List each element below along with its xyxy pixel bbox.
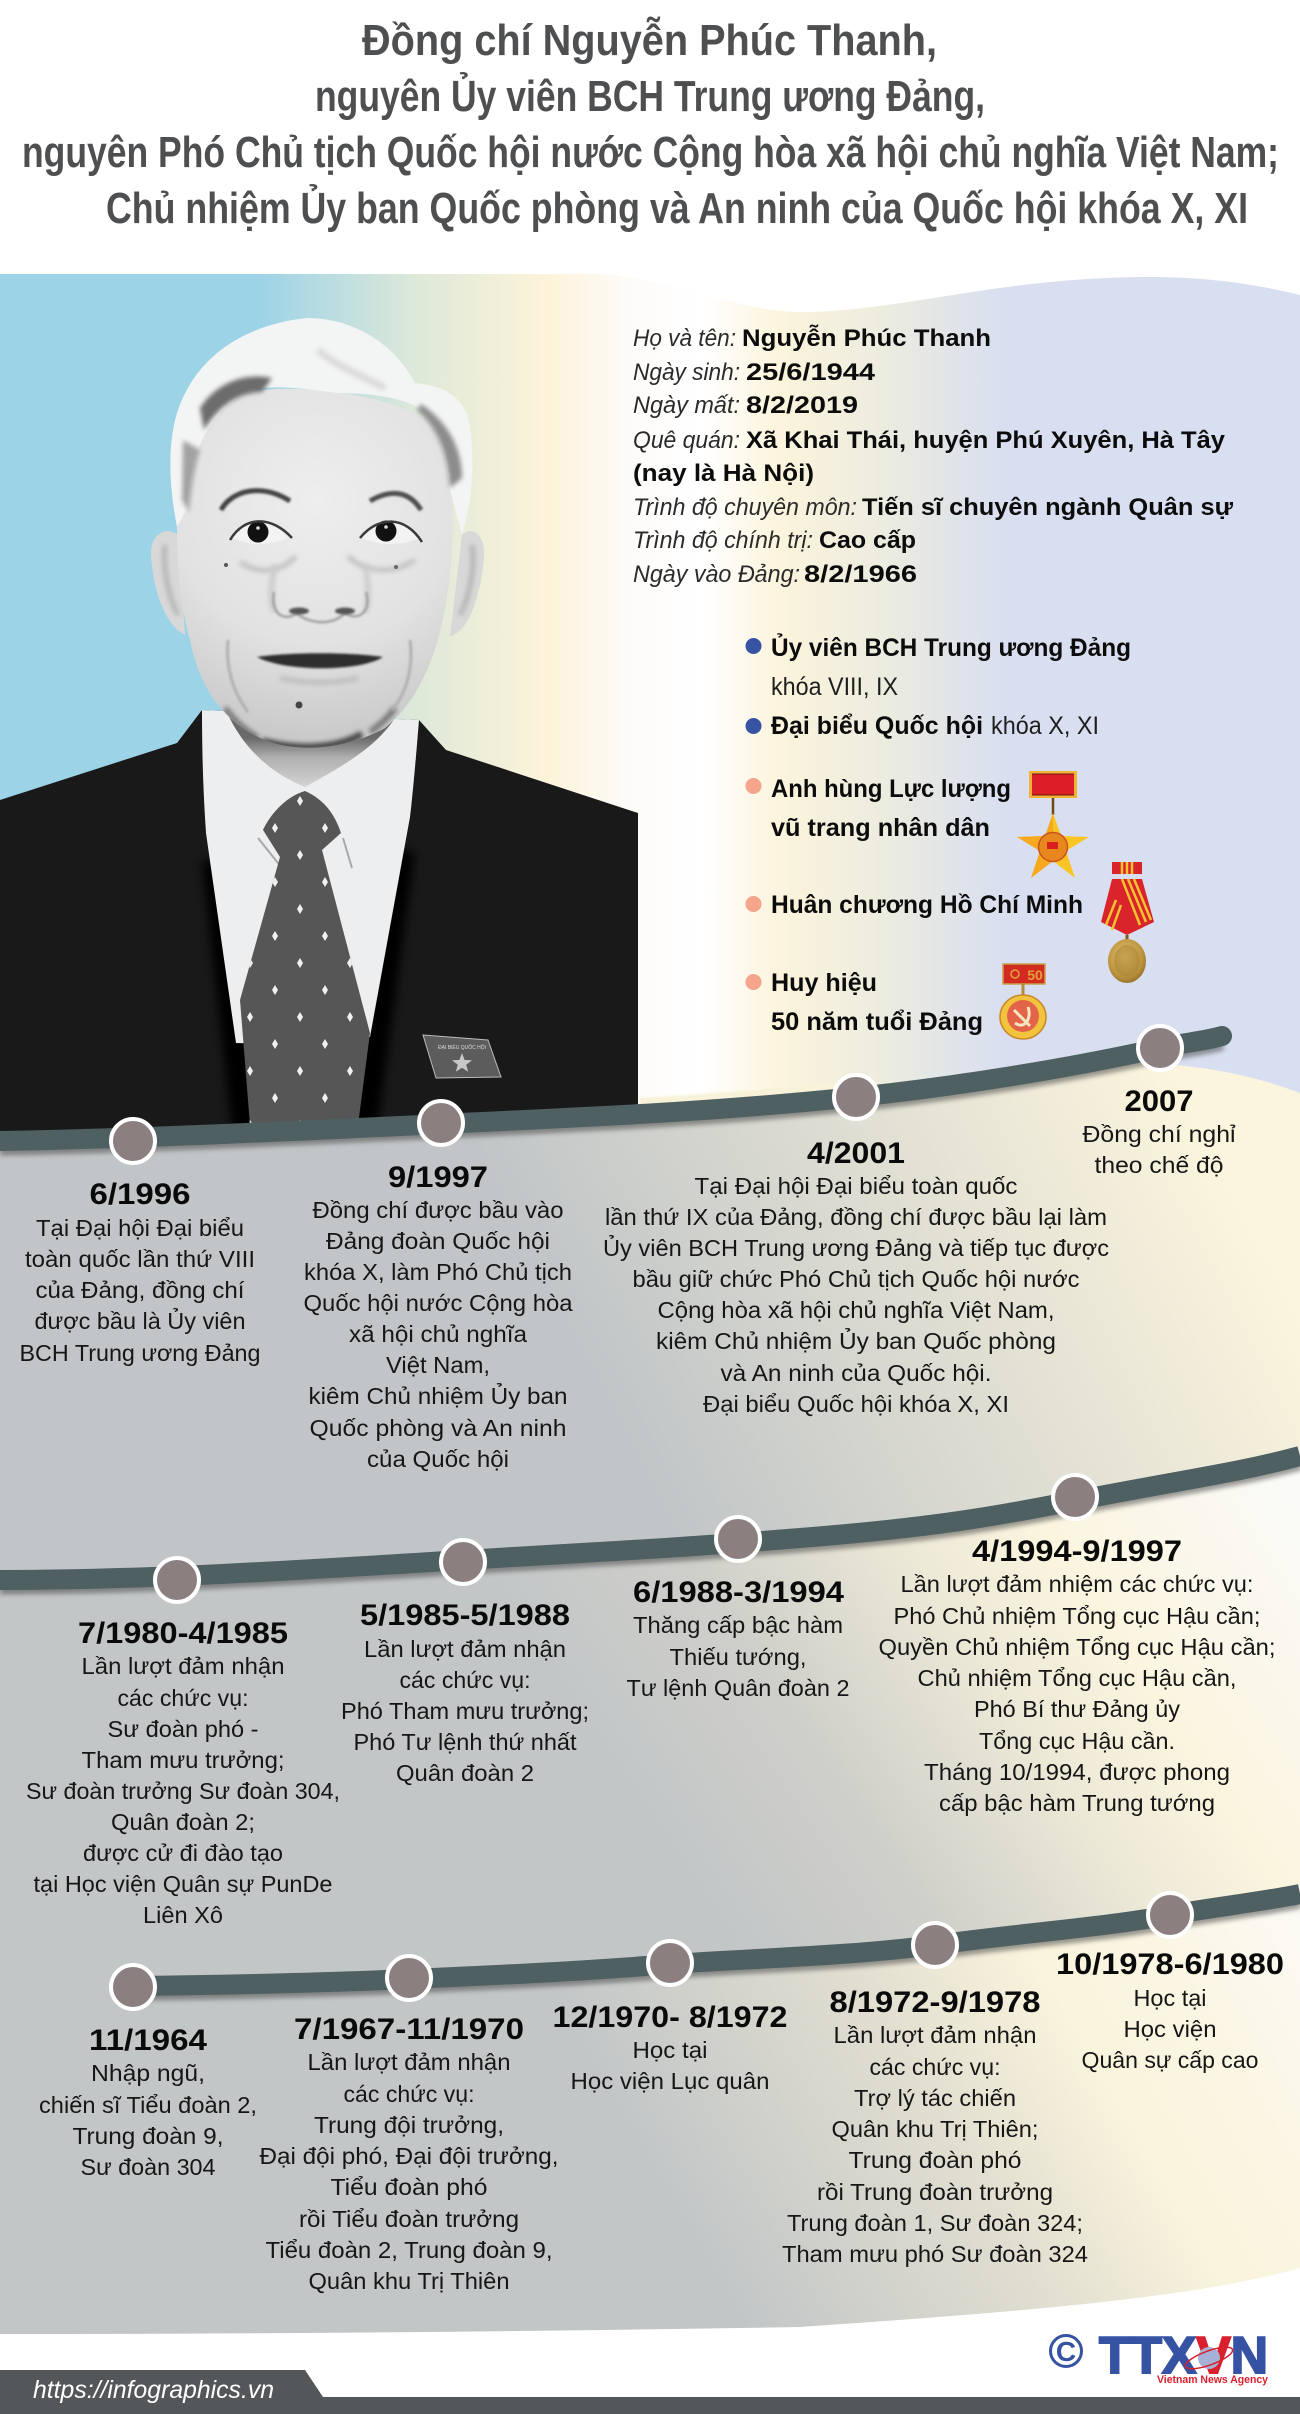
timeline entry: 11/1964: chiến sĩ Tiểu đoàn 2,	[39, 2092, 257, 2118]
timeline entry: 11/1964: Trung đoàn 9,	[72, 2123, 224, 2149]
biography details: Trình độ chính trị:	[633, 527, 813, 554]
portrait photo	[0, 318, 638, 1145]
biography details: Ngày vào Đảng:	[633, 561, 800, 588]
timeline entry: 7/1980-4/1985: Sư đoàn trưởng Sư đoàn 304,	[26, 1778, 340, 1804]
timeline entry: 4/1994-9/1997: cấp bậc hàm Trung tướng	[939, 1790, 1215, 1816]
timeline entry: 8/1972-9/1978: các chức vụ:	[870, 2054, 1000, 2080]
timeline entry: 7/1980-4/1985: Lần lượt đảm nhận	[82, 1653, 284, 1679]
biography details: Quê quán:	[633, 427, 740, 454]
lapel pin: ĐẠI BIỂU QUỐC HỘI	[438, 1044, 486, 1051]
timeline entry: 9/1997: của Quốc hội	[367, 1446, 509, 1472]
positions list: Đại biểu Quốc hội	[771, 712, 983, 740]
positions list: khóa X, XI	[991, 712, 1099, 740]
timeline entry: 7/1967-11/1970: các chức vụ:	[344, 2081, 474, 2107]
timeline entry: 7/1980-4/1985: Quân đoàn 2;	[111, 1809, 255, 1835]
timeline entry: 7/1967-11/1970: Trung đội trưởng,	[314, 2112, 504, 2138]
title: nguyên Ủy viên BCH Trung ương Đảng,	[315, 70, 985, 121]
timeline entry: 4/2001: Đại biểu Quốc hội khóa X, XI	[703, 1391, 1009, 1417]
timeline entry: 9/1997: Đảng đoàn Quốc hội	[326, 1228, 550, 1254]
timeline entry: 4/1994-9/1997: 4/1994-9/1997	[972, 1535, 1182, 1568]
biography details: Ngày mất:	[633, 392, 740, 419]
logo: TTXVN Vietnam News Agency: TTXVN	[1099, 2327, 1268, 2385]
timeline line 3	[111, 1893, 1300, 2009]
panel: timeline background below third line	[0, 1894, 1300, 2334]
timeline entry: 9/1997: xã hội chủ nghĩa	[349, 1321, 527, 1347]
timeline entry: 9/1997: Quốc phòng và An ninh	[310, 1415, 566, 1441]
panel: timeline background between second and third line	[0, 1456, 1300, 1986]
footer bar	[0, 2370, 1300, 2414]
timeline entry: 7/1980-4/1985: được cử đi đào tạo	[83, 1840, 283, 1866]
timeline entry: 7/1967-11/1970: 7/1967-11/1970	[294, 2013, 524, 2046]
timeline entry: 4/2001: Ủy viên BCH Trung ương Đảng và tiếp tục được	[603, 1233, 1109, 1261]
award: Anh hùng Lực lượng vũ trang nhân dân: Anh hùng Lực lượng	[771, 775, 1011, 803]
timeline entry: 6/1996	[20, 1178, 260, 1366]
timeline entry: 12/1970- 8/1972: 12/1970- 8/1972	[552, 2001, 788, 2034]
timeline shadows	[0, 1042, 1300, 1992]
timeline entry: 7/1980-4/1985: Tham mưu trưởng;	[82, 1747, 284, 1773]
timeline entry: 9/1997	[304, 1161, 573, 1472]
timeline entry: 9/1997: Quốc hội nước Cộng hòa	[304, 1290, 573, 1316]
timeline entry: 9/1997: kiêm Chủ nhiệm Ủy ban	[308, 1381, 568, 1409]
positions list: khóa VIII, IX	[771, 673, 898, 701]
panel: top gradient background	[0, 274, 1300, 1160]
timeline entry: 7/1967-11/1970: Lần lượt đảm nhận	[308, 2049, 510, 2075]
icon: party badge	[1000, 964, 1046, 1039]
timeline entry: 4/2001: Tại Đại hội Đại biểu toàn quốc	[694, 1173, 1018, 1199]
icon: hero medal	[1017, 771, 1089, 878]
timeline entry: 7/1967-11/1970: Quân khu Trị Thiên	[308, 2268, 510, 2294]
timeline entry: 5/1985-5/1988: các chức vụ:	[400, 1667, 530, 1693]
timeline entry: 4/1994-9/1997: Chủ nhiệm Tổng cục Hậu cần,	[918, 1665, 1236, 1691]
timeline entry: 6/1988-3/1994: Tư lệnh Quân đoàn 2	[626, 1675, 850, 1701]
timeline entry: 11/1964: 11/1964	[89, 2024, 207, 2057]
award: Anh hùng Lực lượng vũ trang nhân dân	[746, 771, 1089, 878]
biography details: Ngày sinh:	[633, 359, 740, 386]
timeline entry: 4/1994-9/1997: Lần lượt đảm nhiệm các chức vụ:	[900, 1571, 1254, 1597]
timeline entry: 4/1994-9/1997	[878, 1535, 1276, 1816]
timeline entry: 6/1996: toàn quốc lần thứ VIII	[25, 1246, 255, 1272]
hair	[170, 318, 472, 535]
timeline entry: 10/1978-6/1980: Học viện	[1124, 2016, 1216, 2042]
biography details: Họ và tên:	[633, 325, 736, 352]
timeline entry: 5/1985-5/1988	[341, 1599, 589, 1786]
eyebrows	[221, 491, 290, 510]
award: Huy hiệu 50 năm tuổi Đảng	[746, 964, 1046, 1039]
timeline entry: 7/1980-4/1985: các chức vụ:	[118, 1685, 248, 1711]
timeline entry: 11/1964: Nhập ngũ,	[91, 2060, 205, 2086]
biography details: Trình độ chuyên môn:	[633, 494, 857, 521]
timeline entry: 8/1972-9/1978: Trung đoàn 1, Sư đoàn 324;	[787, 2210, 1083, 2236]
timeline entry: 6/1996: Tại Đại hội Đại biểu	[36, 1215, 244, 1241]
eyes	[233, 522, 288, 544]
logo: TTXVN Vietnam News Agency: C	[1056, 2336, 1076, 2367]
title	[22, 15, 1279, 233]
timeline entry: 5/1985-5/1988: Quân đoàn 2	[396, 1760, 534, 1786]
timeline entry: 7/1980-4/1985: Sư đoàn phó -	[108, 1716, 258, 1742]
timeline entry: 10/1978-6/1980: 10/1978-6/1980	[1056, 1948, 1284, 1981]
timeline entry: 2007: Đồng chí nghỉ	[1082, 1121, 1236, 1147]
neck	[222, 700, 402, 787]
timeline entry: 5/1985-5/1988: Phó Tham mưu trưởng;	[341, 1698, 589, 1724]
award: Huân chương Hồ Chí Minh: Huân chương Hồ Chí Minh	[771, 891, 1083, 919]
positions list: Ủy viên BCH Trung ương Đảng	[771, 632, 1131, 662]
timeline entry: 8/1972-9/1978: Trung đoàn phó	[848, 2147, 1022, 2173]
timeline entry: 6/1988-3/1994: Thiếu tướng,	[670, 1644, 806, 1670]
timeline entry: 8/1972-9/1978: Quân khu Trị Thiên;	[832, 2116, 1038, 2142]
timeline entry: 10/1978-6/1980: Quân sự cấp cao	[1082, 2047, 1258, 2073]
timeline entry: 7/1980-4/1985: 7/1980-4/1985	[78, 1617, 288, 1650]
timeline entry: 5/1985-5/1988: Lần lượt đảm nhận	[364, 1636, 566, 1662]
timeline entry: 8/1972-9/1978: 8/1972-9/1978	[830, 1986, 1040, 2019]
award: Huân chương Hồ Chí Minh	[746, 862, 1154, 983]
timeline entry: 7/1967-11/1970: Tiểu đoàn 2, Trung đoàn 9,	[266, 2237, 552, 2263]
footer url: https://infographics.vn	[33, 2376, 274, 2404]
timeline entry: 4/2001	[603, 1137, 1109, 1417]
timeline entry: 7/1967-11/1970: Đại đội phó, Đại đội trưởng,	[260, 2143, 558, 2169]
shirt	[202, 710, 419, 1045]
timeline entry: 9/1997: Đồng chí được bầu vào	[312, 1197, 564, 1223]
timeline entry: 4/2001: kiêm Chủ nhiệm Ủy ban Quốc phòng	[656, 1326, 1056, 1354]
logo: TTXVN Vietnam News Agency: Vietnam News Agency	[1157, 2374, 1269, 2386]
timeline entry: 10/1978-6/1980: Học tại	[1134, 1985, 1206, 2011]
timeline entry: 4/2001: và An ninh của Quốc hội.	[720, 1360, 992, 1386]
icon: Ho Chi Minh order medal	[1101, 862, 1154, 983]
timeline entry: 7/1980-4/1985: tại Học viện Quân sự PunDe	[34, 1871, 332, 1897]
timeline entry: 4/1994-9/1997: Phó Bí thư Đảng ủy	[974, 1696, 1181, 1722]
timeline entry: 2007: theo chế độ	[1094, 1152, 1224, 1178]
biography details: Cao cấp	[819, 527, 916, 554]
timeline entry: 11/1964: Sư đoàn 304	[80, 2154, 216, 2180]
biography details: 8/2/1966	[804, 561, 917, 588]
timeline entry: 6/1996: BCH Trung ương Đảng	[20, 1340, 260, 1366]
timeline entry: 12/1970- 8/1972: Học tại	[632, 2037, 708, 2063]
nose	[273, 592, 367, 622]
timeline entry: 4/1994-9/1997: Phó Chủ nhiệm Tổng cục Hậu cần;	[894, 1603, 1260, 1629]
timeline entry: 6/1996: được bầu là Ủy viên	[34, 1306, 246, 1334]
timeline entry: 7/1980-4/1985: Liên Xô	[143, 1902, 223, 1928]
timeline entry: 7/1967-11/1970: rồi Tiểu đoàn trưởng	[299, 2206, 519, 2232]
biography details: 8/2/2019	[746, 392, 858, 419]
biography details: Xã Khai Thái, huyện Phú Xuyên, Hà Tây	[746, 427, 1226, 454]
timeline entry: 4/1994-9/1997: Quyền Chủ nhiệm Tổng cục Hậu cần;	[878, 1634, 1276, 1660]
award: Anh hùng Lực lượng vũ trang nhân dân: vũ trang nhân dân	[771, 814, 990, 842]
biography details: (nay là Hà Nội)	[633, 460, 814, 487]
title: Đồng chí Nguyễn Phúc Thanh,	[362, 15, 937, 65]
timeline entry: 7/1980-4/1985	[26, 1617, 340, 1928]
timeline entry: 9/1997: 9/1997	[388, 1161, 488, 1194]
positions list	[746, 632, 1131, 740]
suit	[0, 710, 638, 1145]
timeline entry: 4/1994-9/1997: Tháng 10/1994, được phong	[924, 1759, 1230, 1785]
face	[177, 389, 453, 748]
timeline entry: 2007	[1082, 1085, 1236, 1178]
timeline entry: 8/1972-9/1978: Lần lượt đảm nhận	[834, 2022, 1036, 2048]
timeline line 1	[0, 1026, 1222, 1163]
timeline entry: 4/2001: bầu giữ chức Phó Chủ tịch Quốc hội nước	[632, 1266, 1080, 1292]
ears	[151, 531, 185, 635]
timeline entry: 5/1985-5/1988: Phó Tư lệnh thứ nhất	[354, 1729, 577, 1755]
timeline entry: 7/1967-11/1970: Tiểu đoàn phó	[330, 2174, 488, 2200]
biography details: 25/6/1944	[746, 359, 876, 386]
timeline entry: 8/1972-9/1978	[782, 1986, 1088, 2267]
timeline entry: 7/1967-11/1970	[260, 2013, 558, 2294]
timeline entry: 12/1970- 8/1972: Học viện Lục quân	[570, 2068, 770, 2094]
tie	[240, 791, 370, 1125]
biography details	[633, 324, 1234, 588]
timeline entry: 8/1972-9/1978: Tham mưu phó Sư đoàn 324	[782, 2241, 1088, 2267]
biography details: Nguyễn Phúc Thanh	[742, 324, 991, 352]
timeline entry: 2007: 2007	[1124, 1085, 1194, 1118]
award: Huy hiệu 50 năm tuổi Đảng: Huy hiệu	[771, 969, 877, 997]
icon: party badge: 50	[1027, 967, 1043, 983]
timeline entry: 4/2001: 4/2001	[807, 1137, 905, 1170]
panel: timeline background between first and second line	[0, 1063, 1300, 1580]
biography details: Tiến sĩ chuyên ngành Quân sự	[862, 494, 1234, 521]
timeline entry: 12/1970- 8/1972	[552, 2001, 788, 2094]
timeline entry: 8/1972-9/1978: Trợ lý tác chiến	[854, 2085, 1016, 2111]
timeline entry: 6/1988-3/1994: 6/1988-3/1994	[633, 1576, 844, 1609]
mouth	[257, 653, 383, 668]
timeline entry: 6/1988-3/1994	[626, 1576, 850, 1701]
lapel pin	[423, 1035, 501, 1078]
timeline entry: 9/1997: khóa X, làm Phó Chủ tịch	[304, 1259, 572, 1285]
timeline entry: 11/1964	[39, 2024, 257, 2180]
timeline entry: 9/1997: Việt Nam,	[386, 1352, 490, 1378]
award: Huy hiệu 50 năm tuổi Đảng: 50 năm tuổi Đảng	[771, 1008, 983, 1036]
timeline entry: 5/1985-5/1988: 5/1985-5/1988	[360, 1599, 570, 1632]
timeline entry: 6/1996: của Đảng, đồng chí	[36, 1277, 245, 1303]
timeline entry: 8/1972-9/1978: rồi Trung đoàn trưởng	[817, 2179, 1053, 2205]
timeline entry: 4/1994-9/1997: Tổng cục Hậu cần.	[979, 1728, 1175, 1754]
timeline entry: 6/1996: 6/1996	[90, 1178, 190, 1211]
timeline entry: 6/1988-3/1994: Thăng cấp bậc hàm	[633, 1612, 843, 1638]
timeline entry: 4/2001: Cộng hòa xã hội chủ nghĩa Việt Nam,	[658, 1297, 1054, 1323]
timeline entry: 10/1978-6/1980	[1056, 1948, 1284, 2073]
timeline line 2	[0, 1456, 1300, 1602]
timeline entry: 4/2001: lần thứ IX của Đảng, đồng chí được bầu lại làm	[605, 1204, 1107, 1230]
